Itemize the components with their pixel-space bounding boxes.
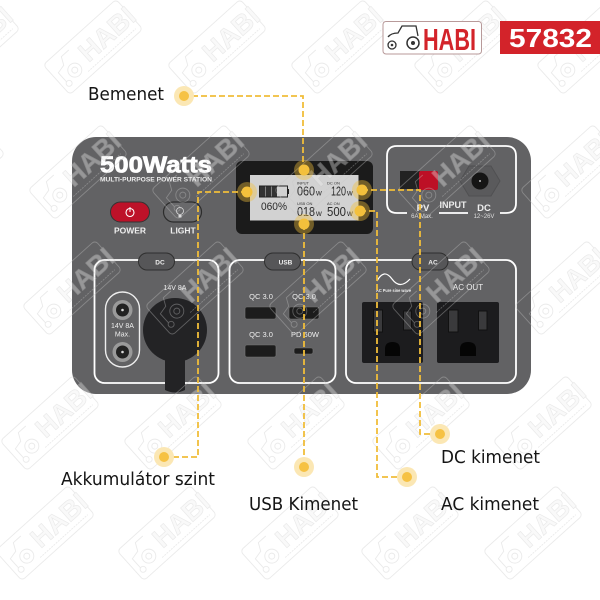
LCD display: 018 [297, 205, 315, 219]
AC outlet left [362, 302, 423, 363]
watermark layer: HABI [52, 242, 121, 309]
watermark layer: HABI [25, 487, 94, 554]
watermark layer: HABI [270, 487, 339, 554]
callout line: AC kimenet [360, 211, 398, 477]
light button [164, 202, 202, 236]
power button: POWER [114, 226, 146, 236]
twin DC sockets: Max. [115, 332, 130, 338]
input panel: DC [477, 203, 491, 214]
panel: USB outputs: QC 3.0 [292, 292, 316, 301]
sine wave icon [377, 274, 410, 284]
LCD display: w [346, 209, 353, 218]
watermark layer: HABI [513, 487, 582, 554]
heading: 500Watts: MULTI-PURPOSE POWER STATION [100, 178, 212, 184]
input panel: PV [417, 203, 430, 214]
label: DC kimenet [430, 424, 540, 468]
LCD display: w [315, 209, 322, 218]
panel: AC outputs: AC Pure sine wave [376, 288, 411, 294]
LCD display: 120 [331, 184, 346, 198]
light button: LIGHT [170, 226, 197, 236]
AC outlet right [437, 302, 499, 363]
watermark layer: HABI [181, 126, 250, 193]
AC tag: AC [428, 260, 438, 266]
LCD display: 060% [261, 201, 287, 213]
panel: power station front [72, 137, 531, 394]
callout line: DC kimenet [362, 190, 433, 434]
LCD display: INPUT [297, 180, 310, 186]
label: USB Kimenet [249, 457, 358, 515]
watermark layer: HABI [298, 242, 367, 309]
LCD display: USB ON [297, 201, 312, 206]
PV connector [400, 171, 438, 190]
label: Akkumulátor szint [61, 447, 215, 490]
panel: DC outputs [94, 253, 218, 392]
watermark layer: HABI [443, 1, 512, 68]
LCD display: DC ON [327, 180, 340, 186]
twin DC sockets [106, 292, 140, 367]
label: AC kimenet [397, 467, 539, 515]
HABI logo [383, 22, 482, 57]
watermark layer: HABI [390, 487, 459, 554]
watermark layer: HABI [523, 377, 592, 444]
watermark layer: HABI [427, 126, 496, 193]
LCD display: w [346, 188, 353, 198]
panel: AC outputs: AC OUT [453, 283, 483, 292]
label: USB Kimenet: USB Kimenet [249, 494, 358, 515]
panel: AC outputs [346, 253, 516, 383]
cigarette socket with cap: 14V 8A [164, 285, 187, 292]
callout line: Bemenet [192, 96, 303, 170]
watermark layer: HABI [175, 242, 244, 309]
input panel: 6A Max. [411, 214, 433, 220]
heading: 500Watts: 500Watts [100, 152, 212, 178]
label: Akkumulátor szint: Akkumulátor szint [61, 469, 215, 490]
callout line: USB Kimenet [303, 224, 305, 460]
DC socket [460, 166, 500, 196]
input panel: 12~26V [474, 214, 494, 220]
watermark layer: HABI [401, 377, 470, 444]
label: DC kimenet: DC kimenet [441, 447, 540, 468]
watermark layer: HABI [320, 1, 389, 68]
LCD display: AC ON [327, 201, 340, 206]
callout line: Akkumulátor szint [172, 192, 247, 457]
DC tag: DC [155, 260, 165, 266]
input panel [387, 146, 516, 220]
watermark layer: HABI [304, 126, 373, 193]
product number badge [500, 21, 600, 54]
panel: USB outputs [230, 253, 336, 383]
watermark layer: HABI [276, 377, 345, 444]
watermark layer: HABI [147, 487, 216, 554]
watermark layer: HABI [30, 377, 99, 444]
watermark layer: HABI [58, 126, 127, 193]
icon: tractor [388, 26, 419, 49]
battery icon [260, 186, 289, 197]
AC tag [412, 253, 448, 270]
LCD display: 060 [297, 184, 315, 198]
watermark layer: HABI [197, 1, 266, 68]
product number badge: 57832 [509, 23, 592, 53]
LCD callout nodes [237, 160, 372, 234]
panel: USB outputs: QC 3.0 [249, 292, 273, 301]
label: Bemenet: Bemenet [88, 84, 164, 105]
watermark layer: HABI [153, 377, 222, 444]
input panel: INPUT [440, 200, 467, 210]
watermark layer: HABI [73, 1, 142, 68]
panel: USB outputs: PD 60W [291, 330, 320, 339]
label: AC kimenet: AC kimenet [441, 494, 539, 515]
panel: USB outputs: QC 3.0 [249, 330, 273, 339]
USB tag: USB [279, 260, 293, 266]
LCD display: 500 [327, 205, 346, 219]
watermark layer: HABI [421, 242, 490, 309]
HABI logo: HABI [423, 22, 476, 57]
twin DC sockets: 14V 8A [111, 323, 134, 330]
LCD display [236, 161, 373, 234]
power button [110, 202, 150, 236]
LCD display: w [315, 188, 322, 198]
